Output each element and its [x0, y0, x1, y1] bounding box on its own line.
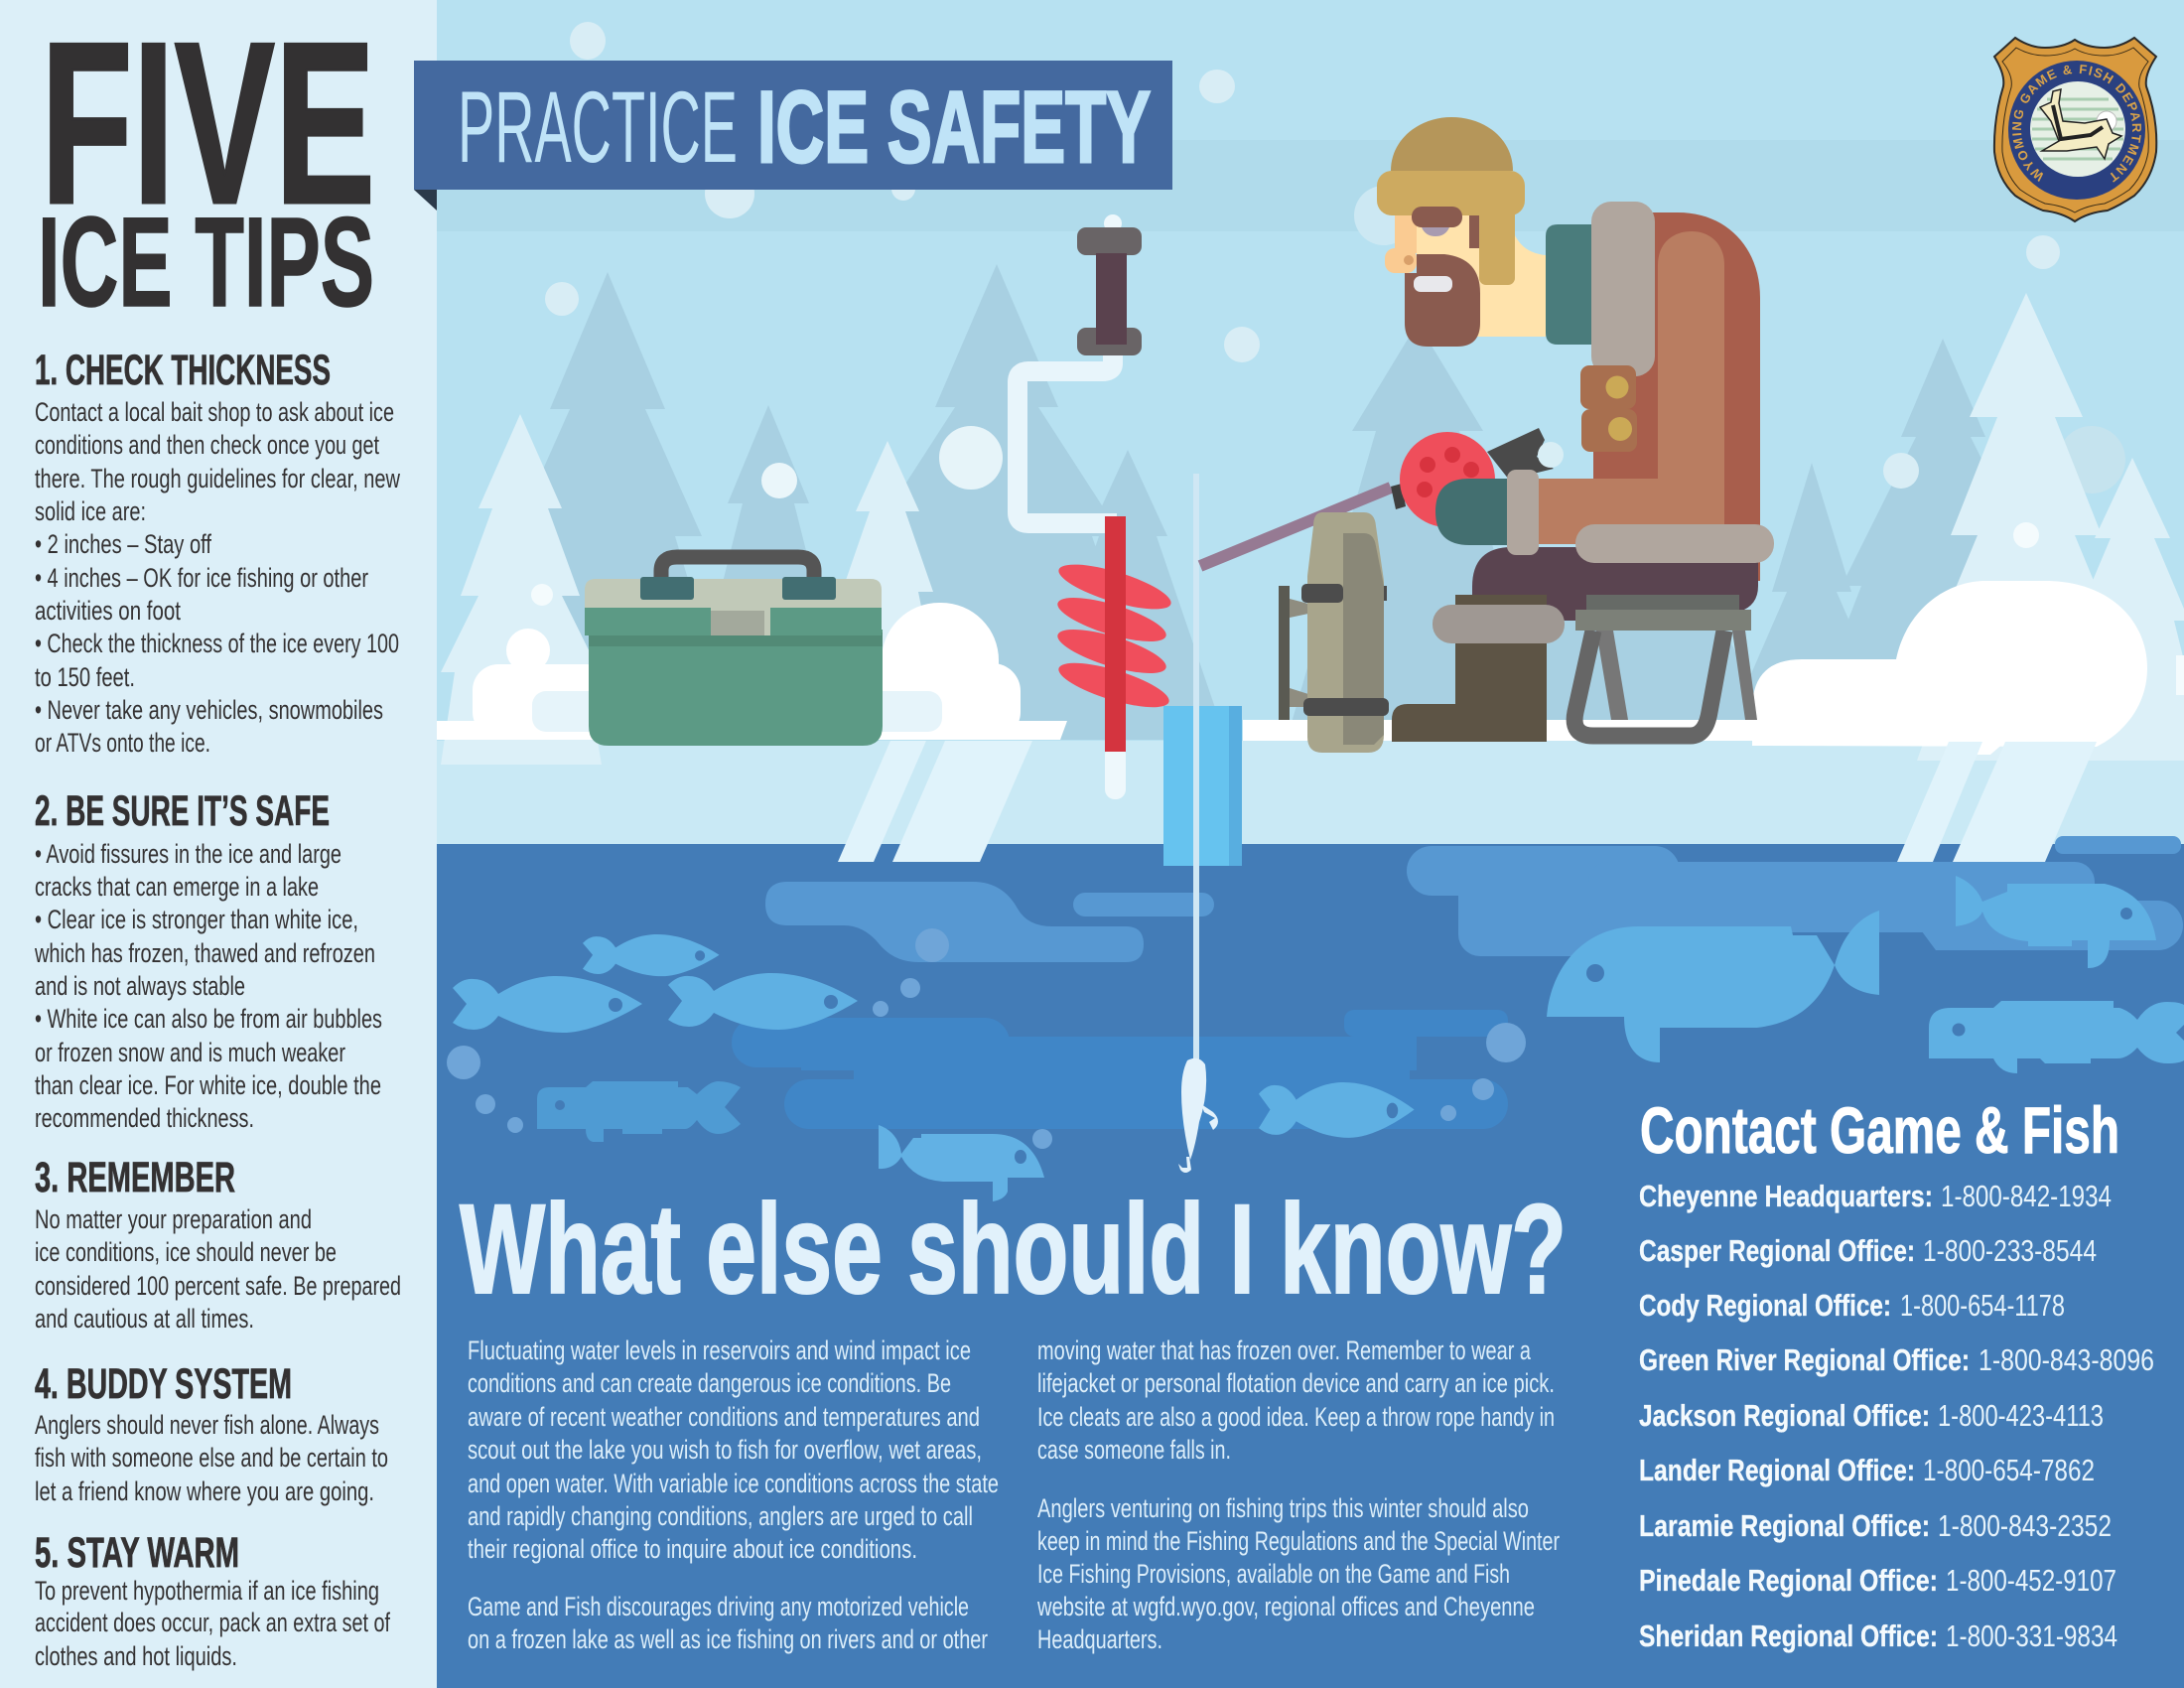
sideburn: [1469, 215, 1479, 248]
tip 5 text: accident does occur, pack an extra set of: [35, 1608, 390, 1637]
icon: sled: [1279, 512, 1389, 753]
contact list: Cheyenne Headquarters:: [1639, 1179, 1933, 1213]
text column 1: scout out the lake you wish to fish for overflow, wet areas,: [468, 1435, 982, 1465]
contact list: Pinedale Regional Office:: [1639, 1563, 1938, 1598]
fish 1: [453, 976, 642, 1033]
coat front: [1529, 231, 1724, 544]
tip 2 text: recommended thickness.: [35, 1103, 254, 1133]
tip 1 text: to 150 feet.: [35, 662, 135, 692]
tip 5 text: [35, 1576, 390, 1671]
contact list: Casper Regional Office:: [1639, 1233, 1915, 1268]
nose: [1385, 248, 1417, 273]
collar: [1546, 224, 1591, 345]
coat back: [1593, 212, 1760, 581]
heading: what else should I know: What else should I know?: [460, 1179, 1567, 1321]
fishing line: [1193, 474, 1199, 1064]
contact list: Jackson Regional Office:: [1639, 1398, 1930, 1433]
text column 2: case someone falls in.: [1037, 1435, 1231, 1465]
contact list: Sheridan Regional Office:: [1639, 1618, 1938, 1653]
tip 1 text: • Never take any vehicles, snowmobiles: [35, 695, 383, 725]
icon: lure: [1178, 1058, 1218, 1173]
tip 2 text: and is not always stable: [35, 971, 245, 1001]
tip 4 heading: 4. BUDDY SYSTEM: [35, 1360, 292, 1408]
fish 8: [1956, 876, 2156, 968]
contact list: 1-800-654-7862: [1923, 1453, 2095, 1487]
tip 3 text: considered 100 percent safe. Be prepared: [35, 1271, 401, 1301]
tip 5 heading: 5. STAY WARM: [35, 1529, 239, 1577]
text column 2: Headquarters.: [1037, 1624, 1162, 1654]
tip 1 text: activities on foot: [35, 596, 181, 626]
text column 1: [468, 1336, 999, 1654]
tip 1 text: solid ice are:: [35, 496, 146, 526]
cuff: [1507, 470, 1539, 555]
tip 2 text: which has frozen, thawed and refrozen: [34, 938, 375, 968]
tip 1 text: Contact a local bait shop to ask about ice: [35, 397, 394, 427]
coat pocket: [1580, 365, 1637, 452]
contact list: 1-800-842-1934: [1941, 1179, 2112, 1213]
icon: ice auger: [1018, 214, 1175, 799]
snow bank left: [437, 603, 1067, 740]
tip 1 text: • Check the thickness of the ice every 100: [35, 629, 399, 658]
tip 2 text: than clear ice. For white ice, double the: [35, 1070, 381, 1100]
tip 1 text: • 4 inches – OK for ice fishing or other: [35, 563, 368, 593]
fish 7: large: [1547, 911, 1879, 1062]
tip 3 text: ice conditions, ice should never be: [35, 1237, 337, 1267]
contact list: 1-800-654-1178: [1900, 1288, 2065, 1323]
badge: Wyoming Game and Fish Department: WYOMING GAME & FISH DEPARTMENT: [2012, 65, 2141, 183]
text column 1: Game and Fish discourages driving any motorized vehicle: [468, 1592, 969, 1621]
tip 4 text: [35, 1410, 388, 1506]
tip 2 text: • White ice can also be from air bubbles: [35, 1004, 382, 1034]
text column 2: Ice cleats are also a good idea. Keep a throw rope handy in: [1037, 1402, 1555, 1432]
ice hole block: [1163, 706, 1242, 866]
sky snow bubbles: [545, 22, 2125, 498]
tip 2 heading: 2. BE SURE IT’S SAFE: [35, 787, 330, 835]
hat brim: [1377, 171, 1525, 215]
ice stripes: [838, 741, 2097, 862]
contact list: Cody Regional Office:: [1639, 1288, 1891, 1323]
tip 3 heading: 3. REMEMBER: [35, 1154, 235, 1201]
contact list: Laramie Regional Office:: [1639, 1508, 1930, 1543]
tip 1 text: conditions and then check once you get: [35, 430, 379, 460]
hat dome: [1391, 117, 1513, 171]
title: FIVE: FIVE: [41, 0, 375, 252]
contact list: 1-800-452-9107: [1946, 1563, 2116, 1598]
tip 2 text: [34, 839, 382, 1133]
contact list: 1-800-233-8544: [1923, 1233, 2097, 1268]
tip 1 heading: 1. CHECK THICKNESS: [35, 347, 331, 394]
tip 2 text: or frozen snow and is much weaker: [35, 1038, 345, 1067]
tip 3 text: No matter your preparation and: [35, 1204, 312, 1234]
text column 2: lifejacket or personal flotation device and carry an ice pick.: [1037, 1368, 1555, 1398]
ice layer: [437, 741, 2184, 844]
tip 4 text: let a friend know where you are going.: [35, 1477, 374, 1506]
eyebrow: [1412, 207, 1462, 227]
text column 2: Ice Fishing Provisions, available on the Game and Fish: [1037, 1559, 1510, 1589]
contact list: [1639, 1179, 2154, 1653]
underwater dark currents: [732, 1010, 1508, 1129]
beard: [1405, 254, 1480, 347]
banner: practice ice safety: [414, 61, 1172, 211]
dark background trees: [478, 264, 2085, 740]
badge: Wyoming Game and Fish Department: [1993, 36, 2158, 222]
tip 1 text: [35, 397, 400, 758]
underwater light currents: [765, 836, 2183, 962]
banner: practice ice safety: PRACTICE: [458, 70, 738, 184]
tip 4 text: fish with someone else and be certain to: [35, 1443, 388, 1473]
tip 5 text: To prevent hypothermia if an ice fishing: [35, 1576, 379, 1606]
waist trim: [1575, 524, 1774, 563]
stool: [1574, 595, 1757, 736]
title: ICE TIPS: ICE TIPS: [38, 192, 374, 334]
reel: [1400, 428, 1564, 527]
tip 2 text: • Avoid fissures in the ice and large: [35, 839, 341, 869]
fish 9: [1929, 1001, 2184, 1073]
fish 5: [879, 1125, 1044, 1201]
figure: ice fisherman: [1377, 117, 1774, 742]
text column 1: and open water. With variable ice conditions across the state: [468, 1469, 999, 1498]
tip 3 text: [35, 1204, 401, 1334]
icon: tackle box: [585, 557, 883, 746]
mouth: [1414, 276, 1452, 292]
ear flap: [1479, 199, 1515, 285]
fish 3: [583, 934, 720, 976]
text column 1: Fluctuating water levels in reservoirs and wind impact ice: [468, 1336, 971, 1365]
tip 4 text: Anglers should never fish alone. Always: [35, 1410, 379, 1440]
fish 4: [537, 1081, 741, 1142]
pants: [1472, 547, 1758, 621]
contact list: Lander Regional Office:: [1639, 1453, 1915, 1487]
fish 6: [1259, 1082, 1415, 1138]
snow bank right: [1243, 581, 2184, 755]
water bubbles: [447, 928, 1526, 1149]
text column 2: website at wgfd.wyo.gov, regional offices and Cheyenne: [1036, 1592, 1535, 1621]
tip 1 text: or ATVs onto the ice.: [35, 728, 210, 758]
text column 1: on a frozen lake as well as ice fishing on rivers and or other: [468, 1624, 988, 1654]
banner: practice ice safety: ICE SAFETY: [757, 70, 1151, 184]
contact list: 1-800-423-4113: [1938, 1398, 2104, 1433]
text column 1: conditions and can create dangerous ice conditions. Be: [468, 1368, 951, 1398]
water: [437, 844, 2184, 1688]
tip 2 text: • Clear ice is stronger than white ice,: [35, 905, 358, 934]
boot cuff: [1433, 605, 1565, 643]
text column 1: their regional office to inquire about ice conditions.: [468, 1534, 917, 1564]
neck and face: [1417, 215, 1546, 337]
mitten: [1435, 479, 1511, 545]
panel: left tips: [0, 0, 437, 1688]
fish 2: [668, 973, 858, 1030]
tip 1 text: there. The rough guidelines for clear, new: [35, 464, 400, 493]
tip 2 text: cracks that can emerge in a lake: [35, 872, 319, 902]
text column 2: keep in mind the Fishing Regulations and the Special Winter: [1037, 1526, 1560, 1556]
contact list: 1-800-843-2352: [1938, 1508, 2112, 1543]
tip 5 text: clothes and hot liquids.: [35, 1641, 237, 1671]
text column 2: moving water that has frozen over. Remember to wear a: [1037, 1336, 1532, 1365]
boot: [1392, 595, 1547, 742]
text column 2: Anglers venturing on fishing trips this winter should also: [1037, 1493, 1529, 1523]
eye: [1422, 227, 1449, 236]
contact list: 1-800-331-9834: [1946, 1618, 2117, 1653]
tip 1 text: • 2 inches – Stay off: [35, 529, 211, 559]
contact list: Green River Regional Office:: [1639, 1342, 1970, 1377]
tip 3 text: and cautious at all times.: [35, 1304, 254, 1334]
text column 1: aware of recent weather conditions and temperatures and: [468, 1402, 980, 1432]
text column 2: [1036, 1336, 1560, 1654]
icon: fishing rod: [1200, 484, 1406, 566]
text column 1: and rapidly changing conditions, anglers are urged to call: [468, 1501, 973, 1531]
light foreground trees: [441, 293, 2184, 765]
shoulder trim: [1591, 202, 1655, 376]
